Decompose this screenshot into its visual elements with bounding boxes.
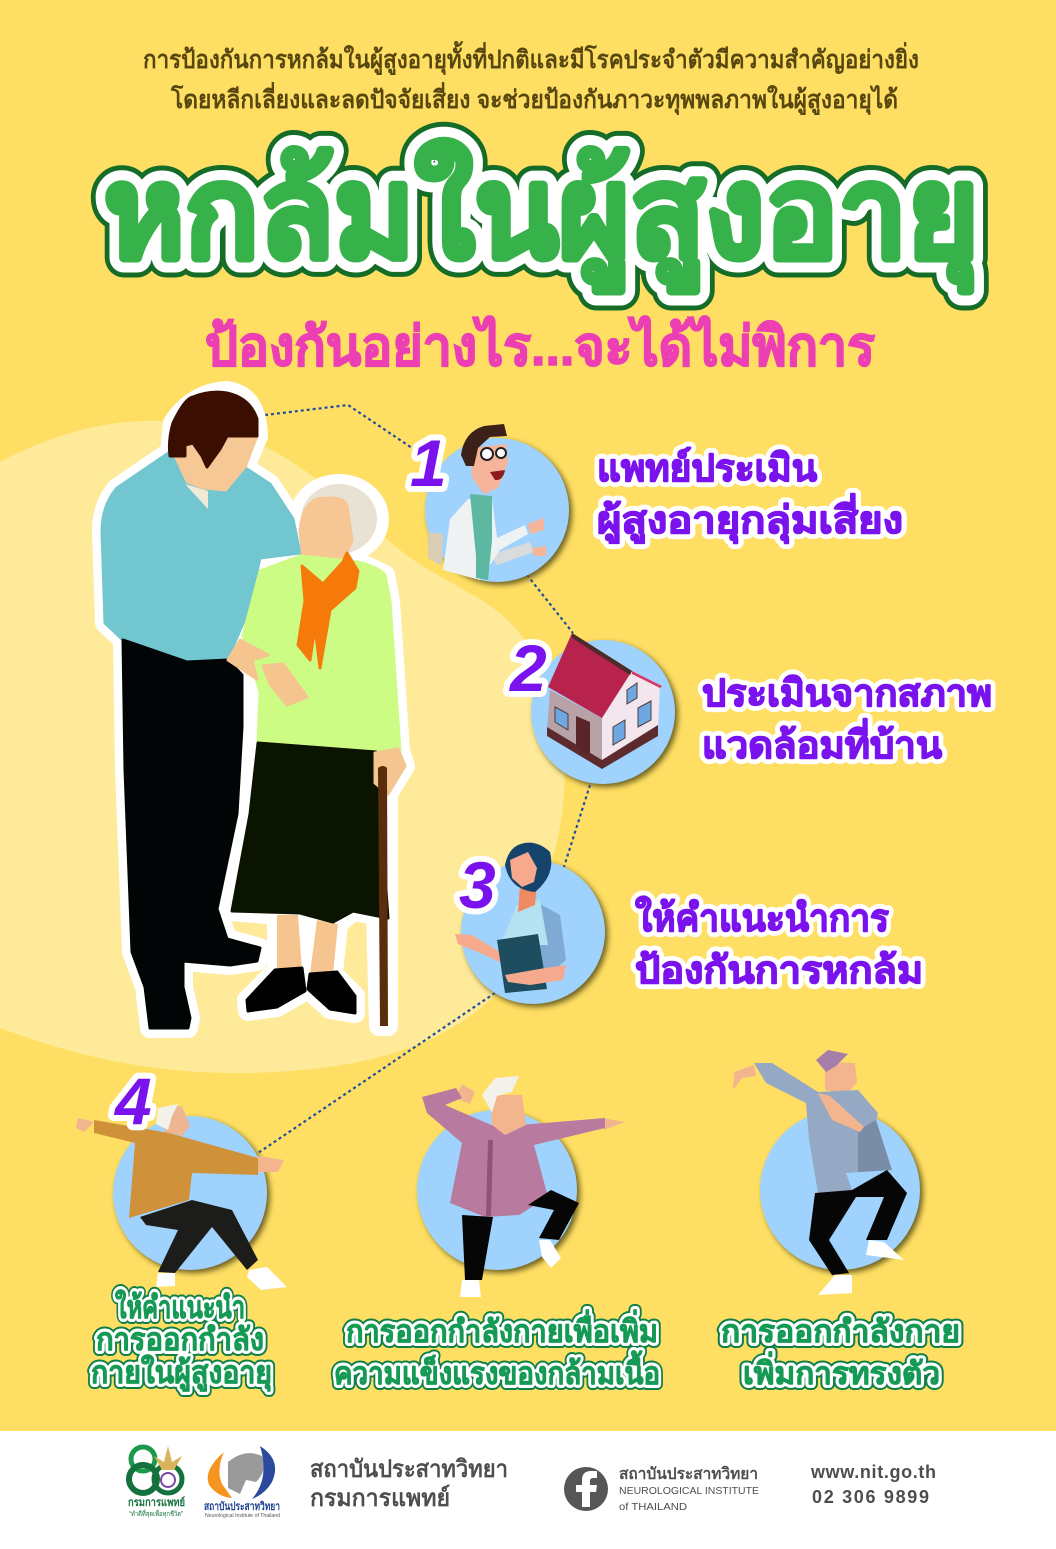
logo: neurological institute: Neurological Institute of Thailand <box>205 1513 280 1519</box>
step 2: house <box>531 633 678 787</box>
step labels: แพทย์ประเมิน <box>597 447 817 490</box>
exercise labels: ความแข็งแรงของกล้ามเนื้อ <box>334 1350 660 1391</box>
step 3: nurse <box>455 843 608 1007</box>
exercise labels: การออกกำลัง <box>96 1322 264 1357</box>
step labels <box>597 447 992 992</box>
icon: facebook <box>564 1467 608 1511</box>
exercise labels: เพิ่มการทรงตัว <box>743 1351 940 1391</box>
man <box>102 392 300 1028</box>
exercise labels: การออกกำลังกายเพื่อเพิ่ม <box>346 1309 658 1349</box>
step numbers <box>113 426 547 1138</box>
exercise labels: ความแข็งแรงของกล้ามเนื้อ <box>334 1350 660 1391</box>
exercise figure 1 <box>76 1104 287 1290</box>
logo: 80 years: กรมการแพทย์ <box>128 1496 185 1509</box>
step numbers: 2 <box>508 631 547 705</box>
step labels: แวดล้อมที่บ้าน <box>702 718 942 767</box>
exercise labels <box>91 1289 960 1392</box>
title: หกล้มในผู้สูงอายุ <box>104 140 979 293</box>
facebook page name: of THAILAND <box>619 1501 687 1513</box>
title: หกล้มในผู้สูงอายุ <box>104 140 979 293</box>
exercise labels: การออกกำลัง <box>96 1322 264 1357</box>
organisation name: สถาบันประสาทวิทยา <box>310 1456 508 1483</box>
exercise figure 2 <box>417 1076 625 1297</box>
contact: www.nit.go.th <box>810 1462 936 1482</box>
exercise labels: ให้คำแนะนำ <box>115 1289 245 1325</box>
step labels: ให้คำแนะนำการ <box>635 896 890 940</box>
dotted connector lines <box>255 405 590 1155</box>
logo: neurological institute <box>204 1446 280 1519</box>
title: หกล้มในผู้สูงอายุ <box>104 140 979 293</box>
step labels: แวดล้อมที่บ้าน <box>702 718 942 767</box>
exercise figure 3 <box>733 1050 923 1295</box>
contact <box>810 1462 936 1507</box>
cane <box>378 766 388 1026</box>
illustration: elderly couple <box>102 391 405 1028</box>
step labels: ให้คำแนะนำการ <box>635 896 890 940</box>
intro text: การป้องกันการหกล้มในผู้สูงอายุทั้งที่ปกติและมีโรคประจำตัวมีความสำคัญอย่างยิ่ง <box>143 40 919 76</box>
step numbers: 1 <box>410 426 447 500</box>
exercise labels: ความแข็งแรงของกล้ามเนื้อ <box>334 1350 660 1391</box>
intro text <box>143 40 919 116</box>
logo: neurological institute: สถาบันประสาทวิทยา <box>204 1500 280 1513</box>
exercise labels: กายในผู้สูงอายุ <box>91 1354 272 1392</box>
woman <box>228 484 405 1013</box>
facebook page name: สถาบันประสาทวิทยา <box>619 1465 758 1483</box>
step labels: ประเมินจากสภาพ <box>702 673 992 715</box>
step labels: แพทย์ประเมิน <box>597 447 817 490</box>
organisation name: กรมการแพทย์ <box>310 1484 450 1512</box>
exercise labels: เพิ่มการทรงตัว <box>743 1351 940 1391</box>
exercise labels: การออกกำลังกาย <box>721 1314 960 1349</box>
exercise labels: กายในผู้สูงอายุ <box>91 1354 272 1392</box>
step numbers: 3 <box>459 848 496 922</box>
exercise labels: ให้คำแนะนำ <box>115 1289 245 1325</box>
step labels: ป้องกันการหกล้ม <box>635 950 923 992</box>
step numbers: 4 <box>113 1064 152 1138</box>
organisation name <box>310 1456 508 1512</box>
facebook page name: NEUROLOGICAL INSTITUTE <box>619 1485 759 1497</box>
step labels: ประเมินจากสภาพ <box>702 673 992 715</box>
step labels: ผู้สูงอายุกลุ่มเสี่ยง <box>597 493 903 544</box>
background blob <box>0 421 564 1073</box>
subtitle: ป้องกันอย่างไร...จะได้ไม่พิการ <box>205 315 875 377</box>
exercise labels: เพิ่มการทรงตัว <box>743 1351 940 1391</box>
step 1: doctor <box>425 424 572 585</box>
intro text: โดยหลีกเลี่ยงและลดปัจจัยเสี่ยง จะช่วยป้องกันภาวะทุพพลภาพในผู้สูงอายุได้ <box>170 82 898 116</box>
exercise labels: การออกกำลังกายเพื่อเพิ่ม <box>346 1309 658 1349</box>
footer <box>0 1431 1056 1549</box>
exercise labels: การออกกำลังกาย <box>721 1314 960 1349</box>
exercise labels: กายในผู้สูงอายุ <box>91 1354 272 1392</box>
logo: 80 years <box>128 1446 185 1518</box>
step labels: ผู้สูงอายุกลุ่มเสี่ยง <box>597 493 903 544</box>
step labels: ป้องกันการหกล้ม <box>635 950 923 992</box>
exercise labels: การออกกำลังกาย <box>721 1314 960 1349</box>
contact: 02 306 9899 <box>812 1487 929 1507</box>
exercise labels: ให้คำแนะนำ <box>115 1289 245 1325</box>
exercise labels: การออกกำลังกายเพื่อเพิ่ม <box>346 1309 658 1349</box>
exercise labels: การออกกำลัง <box>96 1322 264 1357</box>
facebook page name <box>619 1465 759 1513</box>
logo: 80 years: “ทำดีที่สุดเพื่อทุกชีวิต” <box>129 1509 184 1518</box>
